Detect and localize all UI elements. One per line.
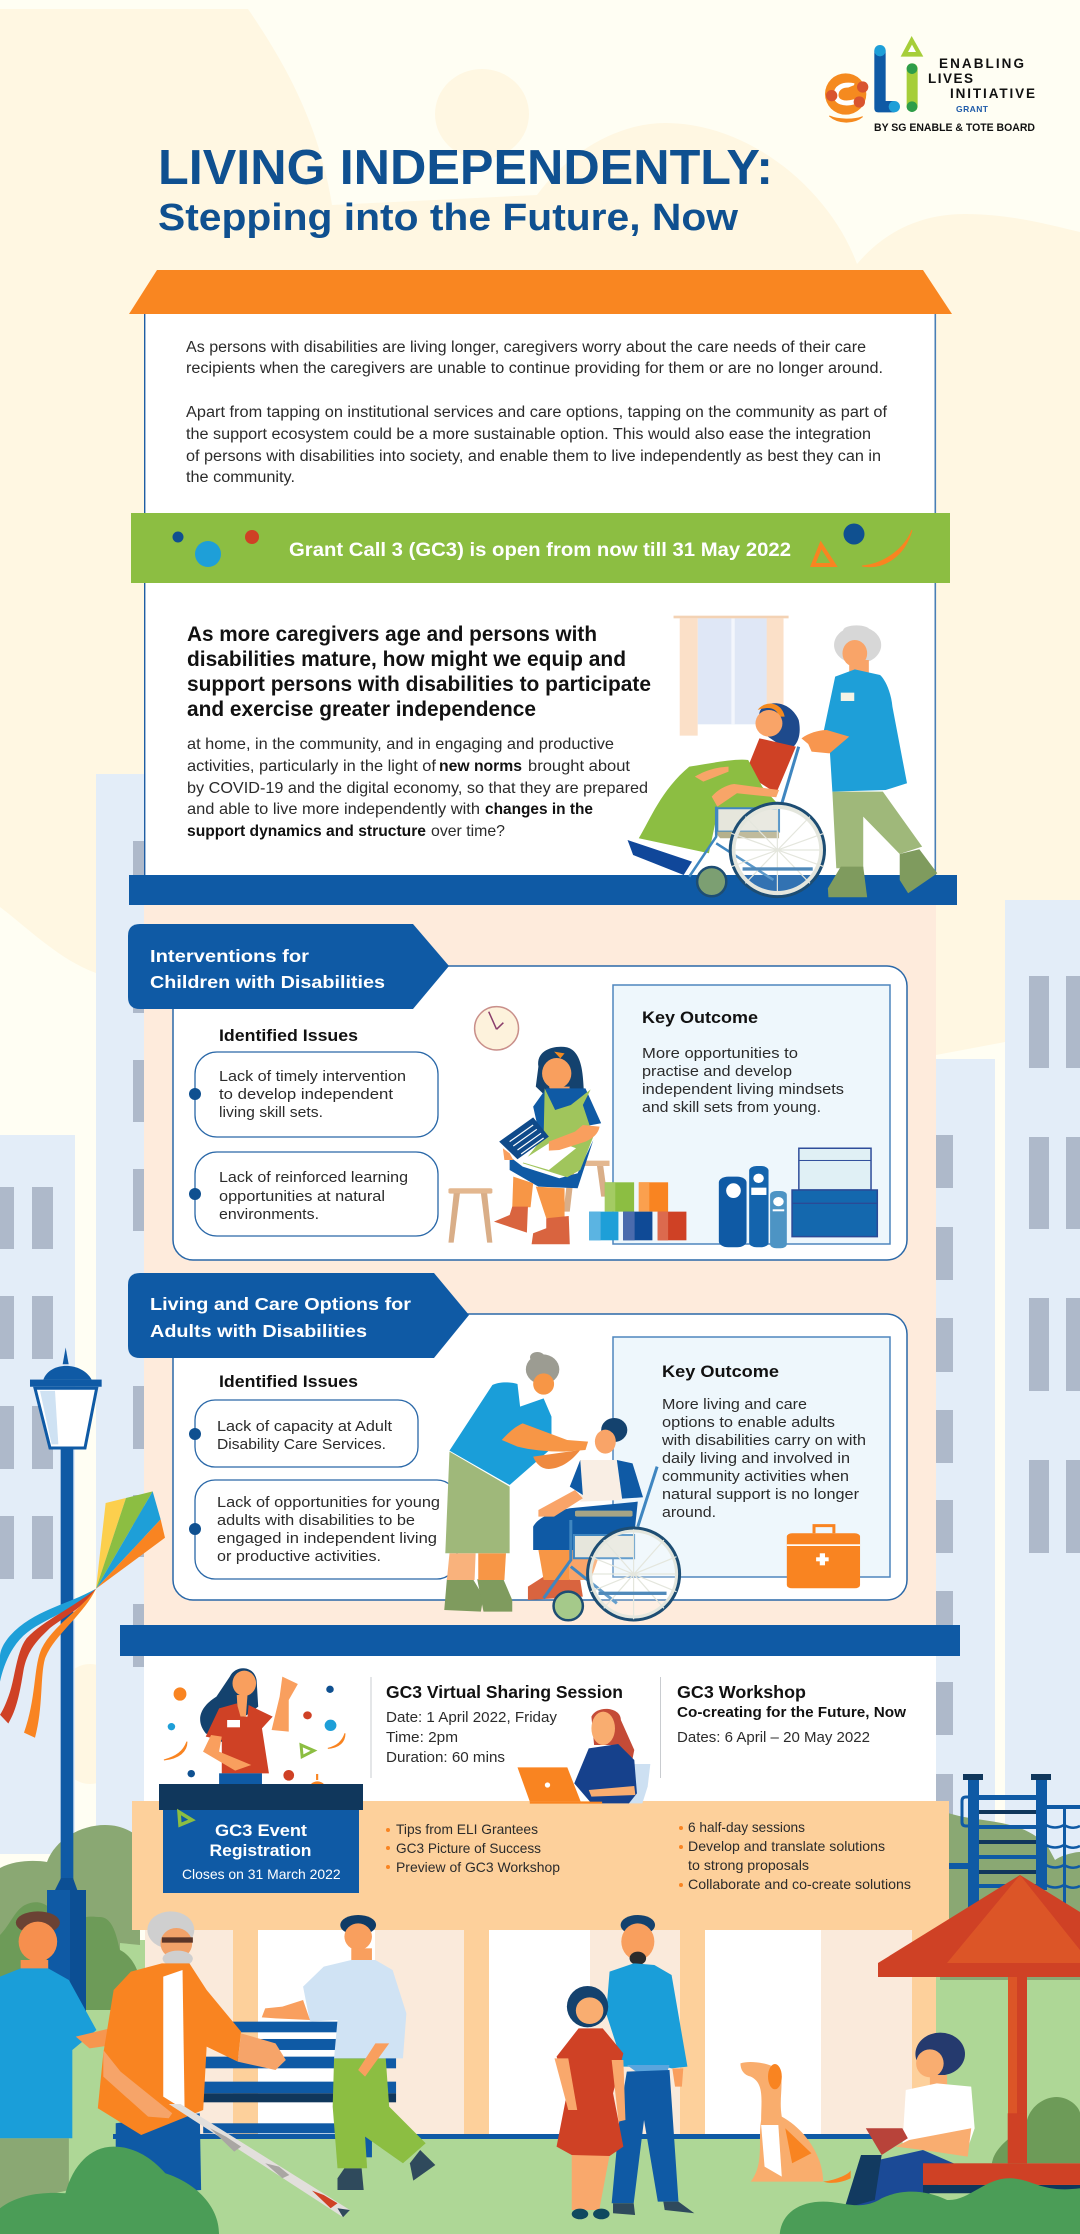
key outcome text: daily living and involved in bbox=[662, 1450, 850, 1467]
walking man bbox=[262, 1915, 435, 2190]
registration box bbox=[163, 1810, 359, 1893]
section tag: Living and Care Options for bbox=[150, 1294, 411, 1314]
issue 2 bbox=[189, 1152, 438, 1236]
gazebo bench and back bush bbox=[923, 2097, 1080, 2193]
introduction text: of persons with disabilities into society, and enable them to live independently as best they can in bbox=[186, 448, 881, 465]
old man with white cane bbox=[98, 1911, 350, 2217]
key outcome text: and skill sets from young. bbox=[642, 1099, 821, 1116]
key outcome box bbox=[613, 985, 890, 1244]
challenge statement body: brought about bbox=[528, 758, 631, 775]
event: virtual sharing session bbox=[386, 1682, 623, 1766]
kite with ribbons bbox=[0, 1491, 165, 1738]
events storey white wall bbox=[144, 1656, 936, 1801]
background buildings right bbox=[930, 900, 1080, 1860]
challenge statement body: by COVID-19 and the digital economy, so that they are prepared bbox=[187, 780, 648, 797]
key outcome text bbox=[661, 1362, 866, 1521]
challenge statement heading: disabilities mature, how might we equip and bbox=[187, 647, 626, 671]
event: virtual sharing session: GC3 Virtual Sharing Session bbox=[386, 1682, 623, 1702]
event: virtual sharing session: Time: 2pm bbox=[386, 1729, 458, 1746]
key outcome text: community activities when bbox=[662, 1468, 849, 1485]
challenge statement body: support dynamics and structure bbox=[187, 823, 426, 840]
house upper wall bbox=[144, 314, 936, 875]
registration box: GC3 Event bbox=[215, 1821, 307, 1840]
issue 2: adults with disabilities to be bbox=[217, 1512, 415, 1529]
card outline bbox=[173, 966, 907, 1260]
lower peach storey bbox=[144, 905, 936, 1625]
key outcome text: More opportunities to bbox=[642, 1045, 798, 1062]
issue 2: Lack of opportunities for young bbox=[217, 1494, 440, 1511]
background buildings left bbox=[0, 774, 146, 1854]
issue 2: or productive activities. bbox=[217, 1548, 381, 1565]
building base line bbox=[113, 2134, 883, 2139]
key outcome text: Key Outcome bbox=[642, 1008, 758, 1027]
logo: Enabling Lives Initiative Grant: INITIATIVE bbox=[950, 86, 1035, 101]
hills and light green ground sides bbox=[0, 1810, 1080, 2234]
issue 1 bbox=[189, 1400, 418, 1467]
section tag bbox=[128, 1273, 469, 1358]
challenge statement heading: As more caregivers age and persons with bbox=[187, 622, 597, 646]
event: workshop: Dates: 6 April – 20 May 2022 bbox=[677, 1729, 870, 1746]
panel: adults with disabilities bbox=[128, 1273, 907, 1620]
key outcome box bbox=[613, 1337, 890, 1577]
father and daughter bbox=[554, 1915, 694, 2219]
front bush right bbox=[780, 2178, 1080, 2234]
workshop bullet list: to strong proposals bbox=[688, 1857, 809, 1873]
dog bbox=[740, 2062, 851, 2183]
peach events band bbox=[132, 1801, 949, 1930]
key outcome text: Key Outcome bbox=[662, 1362, 779, 1381]
event: workshop bbox=[677, 1682, 907, 1746]
green banner: Grant Call 3 bbox=[131, 513, 950, 583]
logo: Enabling Lives Initiative Grant: GRANT bbox=[956, 104, 989, 114]
key outcome text: options to enable adults bbox=[662, 1414, 835, 1431]
blue floor band 2 bbox=[120, 1625, 960, 1656]
event: virtual sharing session: Date: 1 April 2022, Friday bbox=[386, 1709, 557, 1726]
introduction text: Apart from tapping on institutional services and care options, tapping on the community as part of bbox=[186, 404, 888, 421]
section tag: Children with Disabilities bbox=[150, 972, 385, 992]
sharing session bullet list: Preview of GC3 Workshop bbox=[396, 1859, 560, 1875]
section tag bbox=[128, 924, 449, 1009]
illustration: park scene with people, bench, dog and bushes bbox=[0, 1911, 1080, 2234]
challenge statement body bbox=[187, 736, 648, 840]
issue 1: Disability Care Services. bbox=[217, 1436, 386, 1453]
registration box: Closes on 31 March 2022 bbox=[182, 1866, 341, 1882]
event: workshop: GC3 Workshop bbox=[677, 1682, 806, 1702]
dividers bbox=[370, 1677, 661, 1778]
registration box: Registration bbox=[210, 1841, 312, 1860]
gazebo bbox=[878, 1875, 1080, 2163]
colonnade bbox=[145, 1930, 936, 2134]
identified issues heading: Identified Issues bbox=[219, 1026, 358, 1045]
key outcome text: natural support is no longer bbox=[662, 1486, 859, 1503]
title: LIVING INDEPENDENTLY: bbox=[158, 141, 773, 195]
sharing session bullet list: Tips from ELI Grantees bbox=[396, 1821, 538, 1837]
sharing session bullet list bbox=[386, 1821, 560, 1875]
key outcome text: around. bbox=[662, 1504, 716, 1521]
workshop bullet list: Develop and translate solutions bbox=[688, 1838, 885, 1854]
ground bbox=[0, 2139, 1080, 2234]
challenge statement body: over time? bbox=[431, 823, 505, 840]
issue 2: environments. bbox=[219, 1206, 319, 1223]
logo: Enabling Lives Initiative Grant: LIVES bbox=[928, 71, 973, 86]
event: workshop: Co-creating for the Future, Now bbox=[677, 1705, 907, 1721]
key outcome text bbox=[642, 1008, 844, 1116]
workshop bullet list: Collaborate and co-create solutions bbox=[688, 1876, 911, 1892]
title: Stepping into the Future, Now bbox=[158, 197, 738, 239]
challenge statement body: at home, in the community, and in engaging and productive bbox=[187, 736, 614, 753]
introduction text: As persons with disabilities are living longer, caregivers worry about the care needs of their care bbox=[186, 339, 866, 356]
introduction text: the community. bbox=[186, 469, 295, 486]
bench bbox=[203, 2022, 396, 2157]
identified issues heading: Identified Issues bbox=[219, 1372, 358, 1391]
challenge statement body: changes in the bbox=[485, 801, 593, 818]
issue 1: living skill sets. bbox=[219, 1104, 323, 1121]
blue floor band 1 bbox=[129, 875, 957, 905]
key outcome text: with disabilities carry on with bbox=[661, 1432, 866, 1449]
card outline bbox=[173, 1314, 907, 1600]
woman reading bbox=[844, 2033, 975, 2208]
illustration: carer feeding person in wheelchair, medical kit bbox=[444, 1352, 860, 1620]
workshop bullet list: 6 half-day sessions bbox=[688, 1819, 805, 1835]
key outcome text: More living and care bbox=[662, 1396, 807, 1413]
illustration: host woman at registration counter with confetti bbox=[164, 1668, 650, 1804]
section tag: Adults with Disabilities bbox=[150, 1321, 367, 1341]
illustration: girl reading with clock, blocks, binders bbox=[448, 1007, 877, 1248]
issue 1 bbox=[189, 1052, 438, 1137]
issue 2: engaged in independent living bbox=[217, 1530, 437, 1547]
playground climbing frame bbox=[949, 1774, 1080, 1915]
challenge statement heading: and exercise greater independence bbox=[187, 697, 536, 721]
challenge statement body: and able to live more independently with bbox=[187, 801, 480, 818]
section tag: Interventions for bbox=[150, 946, 309, 966]
challenge statement heading: support persons with disabilities to participate bbox=[187, 672, 651, 696]
challenge statement body: activities, particularly in the light of bbox=[187, 758, 437, 775]
issue 2: Lack of reinforced learning bbox=[219, 1169, 408, 1186]
sharing session bullet list: GC3 Picture of Success bbox=[396, 1840, 541, 1856]
key outcome text: independent living mindsets bbox=[642, 1081, 844, 1098]
key outcome text: practise and develop bbox=[642, 1063, 792, 1080]
house roof bbox=[129, 270, 952, 314]
workshop bullet list bbox=[679, 1819, 911, 1892]
introduction text: recipients when the caregivers are unable to continue providing for them or are no longer around. bbox=[186, 360, 883, 377]
challenge statement heading bbox=[187, 622, 651, 721]
man in blue guiding bbox=[0, 1911, 124, 2220]
event: virtual sharing session: Duration: 60 mins bbox=[386, 1749, 505, 1766]
challenge statement body: new norms bbox=[439, 758, 522, 775]
issue 1: Lack of capacity at Adult bbox=[217, 1418, 393, 1435]
issue 1: to develop independent bbox=[219, 1086, 394, 1103]
title bbox=[158, 141, 773, 239]
introduction text: the support ecosystem could be a more sustainable option. This would also ease the integration bbox=[186, 426, 871, 443]
logo: Enabling Lives Initiative Grant bbox=[825, 36, 1035, 134]
registration counter top bbox=[159, 1784, 363, 1810]
introduction text bbox=[186, 339, 888, 486]
street lamp bbox=[30, 1347, 102, 2020]
logo: Enabling Lives Initiative Grant: ENABLING bbox=[939, 56, 1024, 71]
front bush left bbox=[0, 2147, 219, 2234]
green banner: Grant Call 3: Grant Call 3 (GC3) is open from now till 31 May 2022 bbox=[289, 540, 791, 561]
logo: Enabling Lives Initiative Grant: BY SG ENABLE & TOTE BOARD bbox=[874, 122, 1035, 134]
illustration: caregiver pushing wheelchair with window bbox=[628, 616, 937, 897]
issue 2 bbox=[189, 1480, 457, 1579]
issue 1: Lack of timely intervention bbox=[219, 1068, 406, 1085]
issue 2: opportunities at natural bbox=[219, 1188, 385, 1205]
panel: children with disabilities bbox=[128, 924, 907, 1260]
